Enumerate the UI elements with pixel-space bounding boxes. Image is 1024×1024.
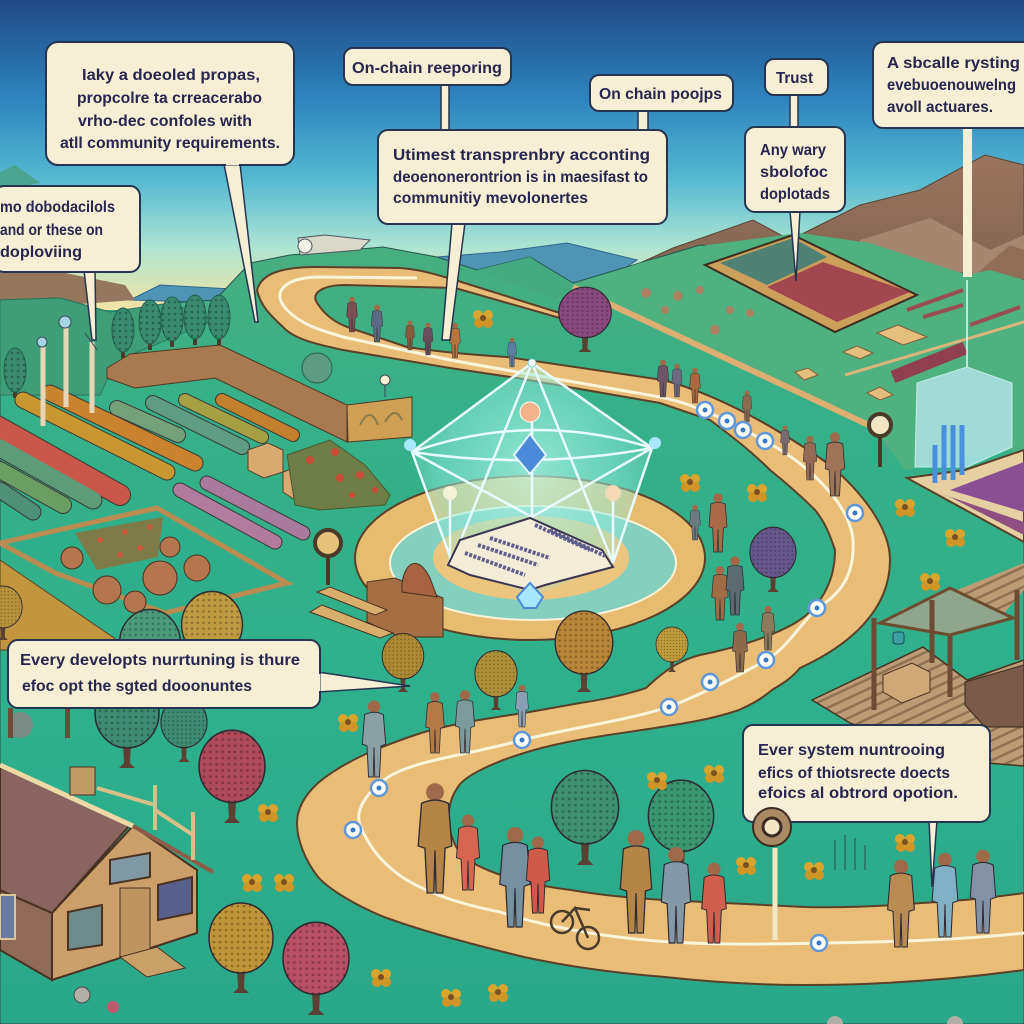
- callout: on-chain reporting: [344, 48, 511, 132]
- far left green hill: [0, 165, 40, 190]
- callout: proposal: [46, 42, 294, 322]
- picnic bench: [310, 587, 393, 638]
- sky: [0, 0, 1024, 310]
- callout: every system: efics of thiotsrecte doects: [758, 765, 950, 782]
- rocks and small trunks: [7, 708, 963, 1024]
- small bush by wall: [302, 353, 332, 383]
- callout: transparency: Utimest transprenbry acconting: [393, 147, 650, 164]
- crates: [248, 443, 320, 502]
- observatory on hill: [298, 235, 370, 255]
- mountains right: [640, 155, 1024, 290]
- central plaza: [355, 476, 705, 640]
- callout: every developer: efoc opt the sgted dooonuntes: [22, 678, 252, 695]
- red crop strips right: [845, 290, 1024, 377]
- callout: any wary: doplotads: [760, 186, 830, 203]
- callout: any wary: sbolofoc: [760, 164, 828, 181]
- callout: trust: Trust: [776, 70, 814, 87]
- winding path: [257, 267, 1024, 985]
- desk and seated person: [367, 563, 443, 637]
- callout: on chain projects: On chain poojps: [599, 86, 722, 103]
- fenced garden plot: [0, 508, 287, 613]
- callout: every system: Ever system nuntrooing: [758, 742, 945, 759]
- callout: transparency: [378, 130, 667, 340]
- dome node icons: [404, 359, 661, 608]
- callout: scalable system: evebuoenouwelng: [887, 77, 1016, 94]
- callout: every developer: Every developts nurrtuning is thure: [20, 652, 300, 669]
- hillside tan retaining edge: [573, 287, 873, 427]
- left rear hill: [0, 298, 215, 395]
- house: [0, 765, 213, 980]
- signpost over callout: [753, 808, 791, 940]
- rubble and plants on hillside: [641, 286, 754, 335]
- callout: deploying: doploviing: [0, 244, 82, 261]
- callout: transparency: deoenonerontrion is in maesifast to: [393, 169, 648, 186]
- community members along path: [347, 297, 996, 947]
- flower bush: [287, 440, 390, 510]
- wind turbines: [43, 318, 92, 426]
- right hillside field area: [573, 233, 1024, 500]
- glass data cube: [915, 280, 1012, 483]
- callout: every developer: [8, 640, 410, 708]
- crop rows left field: [0, 393, 303, 542]
- mid green hill: [477, 257, 573, 300]
- callout: scalable system: avoll actuares.: [887, 99, 993, 116]
- callout: proposal: propcolre ta crreacerabo: [77, 90, 262, 107]
- conifer trees: [4, 295, 230, 398]
- tan hillside: [0, 560, 117, 650]
- callout: on chain projects: [590, 75, 733, 132]
- callout: trust: [765, 59, 828, 129]
- far left brown hills: [0, 270, 135, 310]
- callout: deploying: mo dobodacilols: [0, 199, 115, 216]
- callout: proposal: Iaky a doeoled propas,: [82, 67, 260, 84]
- lower right flower plot: [907, 450, 1024, 542]
- wooden deck with pergola: [812, 563, 1024, 766]
- path trust nodes: [345, 402, 863, 951]
- red flowers on bush: [306, 448, 378, 498]
- callout: scalable system: A sbcalle rysting: [887, 55, 1020, 72]
- wind turbine heads: [37, 316, 97, 350]
- callout: any wary: [745, 127, 845, 281]
- trees: [0, 287, 796, 1015]
- callout: proposal: atll community requirements.: [60, 135, 280, 152]
- terrace field plot top right: [705, 235, 917, 332]
- ground: [0, 245, 1024, 1024]
- callout: on-chain reporting: On-chain reeporing: [352, 60, 502, 77]
- distant blue hills: [130, 243, 637, 305]
- callout: scalable system: [873, 42, 1024, 277]
- open book: [448, 518, 613, 590]
- grass tuft: [835, 835, 865, 870]
- flowers: [242, 310, 965, 1007]
- bicycle: [551, 908, 599, 949]
- callout: proposal: vrho-dec confoles with: [78, 113, 252, 130]
- tan field plots right: [795, 325, 927, 400]
- callout: deploying: [0, 186, 140, 340]
- terraced retaining wall: [107, 345, 412, 442]
- callout: any wary: Any wary: [760, 142, 826, 159]
- callout: transparency: communitiy mevolonertes: [393, 190, 588, 207]
- callout: every system: efoics al obtrord opotion.: [758, 785, 958, 802]
- glass dome with nodes: [412, 363, 652, 597]
- signposts: [315, 414, 891, 585]
- callout: every system: [743, 725, 990, 887]
- callout: deploying: and or these on: [0, 222, 103, 239]
- fence near house: [97, 785, 193, 860]
